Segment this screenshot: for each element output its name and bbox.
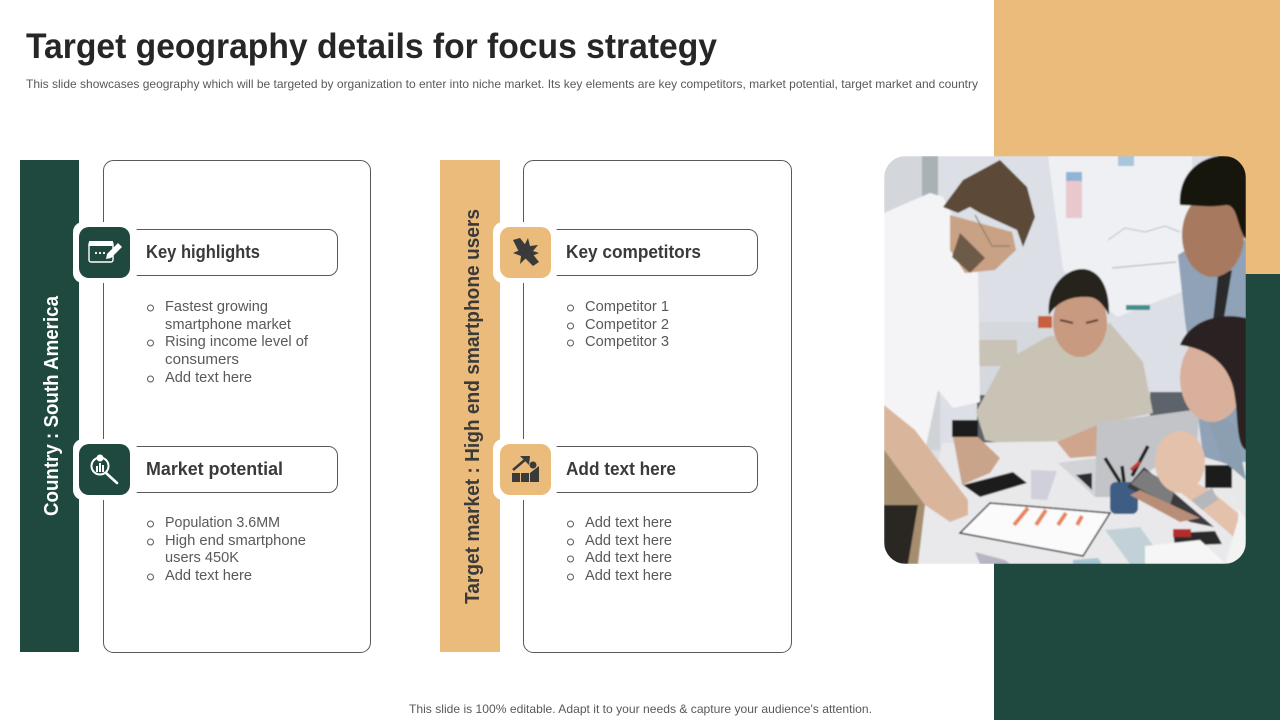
bullet list: Add text here <box>585 568 672 584</box>
section: market potential <box>73 439 338 584</box>
bullet list <box>148 515 306 584</box>
bullet list: consumers <box>165 352 239 368</box>
heading: Add text here <box>566 459 676 479</box>
heading: Market potential <box>146 459 283 479</box>
panel: target market <box>440 160 792 652</box>
bullet list: Fastest growing <box>165 299 268 315</box>
bullet list: High end smartphone <box>165 533 306 549</box>
heading pill <box>120 446 338 492</box>
side bar: country <box>20 160 79 652</box>
icon backing <box>73 439 137 500</box>
bullet list: Add text here <box>585 515 672 531</box>
side bar label: Target market : High end smartphone users <box>462 209 484 604</box>
bullet list: Add text here <box>165 370 252 386</box>
footer note: This slide is 100% editable. Adapt it to your needs & capture your audience's attention. <box>409 702 872 716</box>
heading: Key competitors <box>566 242 701 262</box>
decorative block: green bottom right <box>994 274 1280 720</box>
heading pill <box>540 446 758 492</box>
title: Target geography details for focus strategy <box>26 27 718 66</box>
card outline <box>104 160 370 652</box>
bullet list: Population 3.6MM <box>165 515 280 531</box>
icon backing <box>493 439 557 500</box>
bullet list: Competitor 3 <box>585 334 669 350</box>
bullet list: Add text here <box>585 533 672 549</box>
side bar label: Country : South America <box>41 295 63 516</box>
heading pill <box>540 230 758 276</box>
bullet list: Competitor 1 <box>585 299 669 315</box>
icon: card with pen <box>79 227 130 278</box>
section: key competitors <box>493 222 758 350</box>
icon: clashing arrows <box>500 227 551 278</box>
decorative block: orange top right <box>994 0 1280 274</box>
heading: Key highlights <box>146 242 260 262</box>
subtitle: This slide showcases geography which will be targeted by organization to enter into niche market. Its key elements are key competitors, market potential, target market and country <box>26 77 978 91</box>
side bar: target market <box>440 160 500 652</box>
bullet list: Competitor 2 <box>585 317 669 333</box>
photo: team reviewing charts at a table <box>884 156 1246 564</box>
card outline <box>524 160 792 652</box>
section: key highlights <box>73 222 338 386</box>
bullet list: smartphone market <box>165 317 291 333</box>
panel: country South America <box>20 160 370 652</box>
bullet list <box>148 299 309 386</box>
bullet list: Add text here <box>585 550 672 566</box>
bullet list <box>568 299 669 350</box>
icon backing <box>73 222 137 283</box>
bullet list: Add text here <box>165 568 252 584</box>
bullet list: users 450K <box>165 550 239 566</box>
icon: magnifier with chart <box>79 444 130 495</box>
bullet list <box>568 515 672 584</box>
icon: growth chart with arrow <box>500 444 551 495</box>
bullet list: Rising income level of <box>165 334 309 350</box>
icon backing <box>493 222 557 283</box>
heading pill <box>120 230 338 276</box>
section: add text here <box>493 439 758 584</box>
